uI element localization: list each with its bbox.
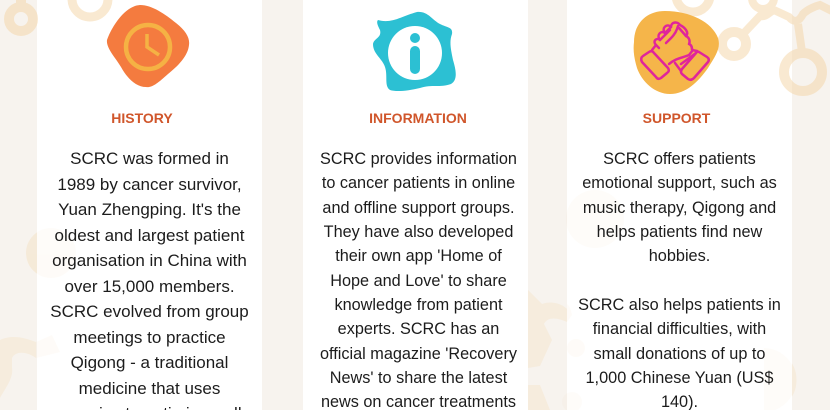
text block: support: financial difficulties, with [593, 320, 766, 338]
text block: history [50, 149, 249, 410]
text block: information: They have also developed [324, 223, 513, 241]
heading: information: INFORMATION [369, 110, 467, 126]
text block: support: SCRC offers patients [603, 150, 756, 168]
text block: support: SCRC also helps patients in [578, 296, 781, 314]
text block: history: meetings to practice [73, 328, 226, 346]
text block: information: to cancer patients in online [322, 174, 515, 192]
text block: information: Hope and Love' to share [330, 272, 507, 290]
text block: support: emotional support, such as [582, 174, 777, 192]
text block: history: Yuan Zhengping. It's the [58, 200, 241, 219]
text block: support: hobbies. [649, 247, 710, 265]
text block: information: experts. SCRC has an [338, 320, 499, 338]
text block: history: SCRC evolved from group [50, 302, 249, 321]
panel: information card [303, 0, 528, 410]
text block: history: 1989 by cancer survivor, [57, 174, 242, 194]
text block: information: knowledge from patient [334, 296, 502, 314]
text block: support: music therapy, Qigong and [583, 199, 776, 217]
text block: information: News' to share the latest [330, 369, 507, 387]
text block: history: medicine that uses [79, 378, 220, 398]
icon: information on teal blob [373, 12, 456, 91]
heading: history: HISTORY [111, 110, 173, 126]
text block: history: organisation in China with [52, 251, 247, 270]
text block: information: their own app 'Home of [335, 247, 502, 265]
panel: support card [567, 0, 792, 410]
text block: history: oldest and largest patient [55, 226, 244, 244]
text block: history: SCRC was formed in [70, 149, 229, 168]
text block: history: Qigong - a traditional [71, 353, 228, 372]
icon: clock on orange blob [106, 5, 190, 88]
text block: information: and offline support groups. [322, 199, 515, 217]
heading: support: SUPPORT [643, 110, 710, 126]
text block: support: small donations of up to [594, 345, 765, 363]
icon: handshake on yellow blob [634, 11, 719, 94]
text block: information: SCRC provides information [320, 150, 517, 168]
text block: support [578, 150, 781, 410]
text block: history: over 15,000 members. [64, 276, 235, 296]
text block: support: 1,000 Chinese Yuan (US$ [586, 369, 773, 387]
panel: history card [37, 0, 262, 410]
text block: support: helps patients find new [597, 223, 762, 241]
text block: information [320, 150, 517, 410]
text block: information: official magazine 'Recovery [320, 345, 517, 363]
